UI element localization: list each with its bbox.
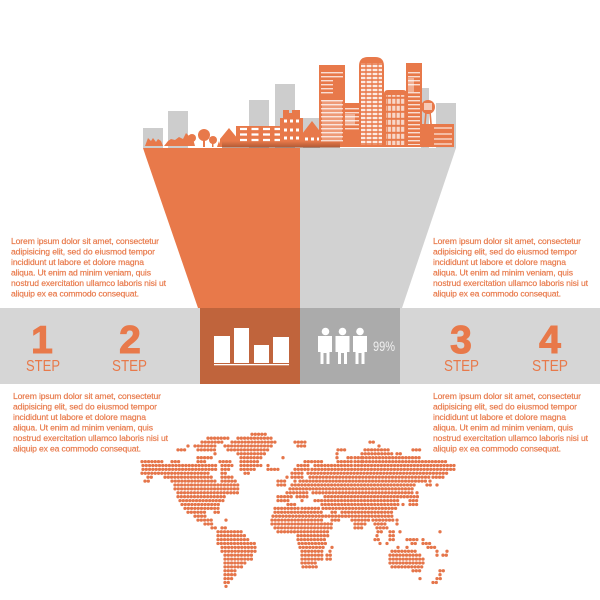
block B: [343, 103, 367, 147]
text block: top right: [433, 236, 589, 298]
text block: top right: Lorem ipsum dolor sit amet, consectetur: [433, 236, 581, 246]
text block: top right: nostrud exercitation ullamco laboris nisi ut: [433, 278, 589, 288]
water tower: [421, 100, 435, 147]
text block: bottom left: aliquip ex ea commodo consequat.: [13, 444, 141, 454]
step 3: 3: [450, 319, 472, 362]
text block: bottom right: [433, 391, 589, 454]
text block: top left: Lorem ipsum dolor sit amet, consectetur: [11, 236, 159, 246]
step 4: 4: [539, 319, 561, 362]
text block: bottom right: Lorem ipsum dolor sit amet, consectetur: [433, 391, 581, 401]
text block: top left: adipisicing elit, sed do eiusmod tempor: [11, 246, 155, 256]
text block: bottom left: incididunt ut labore et dolore magna: [13, 412, 146, 422]
step 1: STEP: [26, 358, 60, 375]
step 3: STEP: [444, 358, 479, 375]
panel: bar chart square: [200, 308, 300, 384]
step 2: 2: [119, 319, 141, 362]
text block: bottom right: nostrud exercitation ullamco laboris nisi ut: [433, 433, 589, 443]
percentage label: 99%: [373, 339, 395, 354]
text block: top right: aliquip ex ea commodo consequat.: [433, 288, 561, 298]
icon: bar chart: [214, 328, 289, 365]
step 2: [112, 319, 147, 375]
city skyline: [143, 57, 456, 148]
text block: bottom left: adipisicing elit, sed do eiusmod tempor: [13, 402, 157, 412]
text block: bottom right: adipisicing elit, sed do eiusmod tempor: [433, 402, 577, 412]
text block: top right: aliqua. Ut enim ad minim veniam, quis: [433, 268, 573, 278]
tower E: [406, 63, 422, 147]
text block: bottom left: [13, 391, 169, 454]
funnel: grey half: [300, 148, 456, 308]
text block: top left: aliqua. Ut enim ad minim veniam, quis: [11, 268, 151, 278]
step 4: STEP: [532, 358, 568, 375]
low-rise houses and blocks: [220, 110, 336, 147]
step 4: [532, 319, 568, 375]
trees: [145, 129, 221, 147]
text block: top left: nostrud exercitation ullamco laboris nisi ut: [11, 278, 167, 288]
building D: [384, 90, 407, 147]
text block: bottom left: aliqua. Ut enim ad minim veniam, quis: [13, 422, 153, 432]
text block: top right: incididunt ut labore et dolore magna: [433, 257, 566, 267]
tall tower A: [319, 65, 345, 147]
funnel: orange half: [143, 148, 300, 308]
rounded tower C: [359, 57, 384, 147]
text block: top left: incididunt ut labore et dolore magna: [11, 257, 144, 267]
low building F: [422, 124, 454, 147]
text block: bottom left: Lorem ipsum dolor sit amet, consectetur: [13, 391, 161, 401]
text block: top left: [11, 236, 167, 298]
text block: bottom right: aliquip ex ea commodo consequat.: [433, 444, 561, 454]
text block: bottom right: aliqua. Ut enim ad minim veniam, quis: [433, 422, 573, 432]
step 3: [444, 319, 479, 375]
icon: three people: [318, 328, 367, 364]
base shadow: [222, 141, 340, 148]
text block: top right: adipisicing elit, sed do eiusmod tempor: [433, 246, 577, 256]
background band: [0, 308, 600, 384]
step 2: STEP: [112, 358, 147, 375]
step 1: 1: [31, 319, 53, 362]
text block: top left: aliquip ex ea commodo consequat.: [11, 288, 139, 298]
step 1: [26, 319, 60, 375]
text block: bottom left: nostrud exercitation ullamco laboris nisi ut: [13, 433, 169, 443]
grey background buildings: [143, 84, 456, 148]
text block: bottom right: incididunt ut labore et dolore magna: [433, 412, 566, 422]
panel: people square: [300, 308, 400, 384]
dotted world map: [142, 434, 455, 586]
